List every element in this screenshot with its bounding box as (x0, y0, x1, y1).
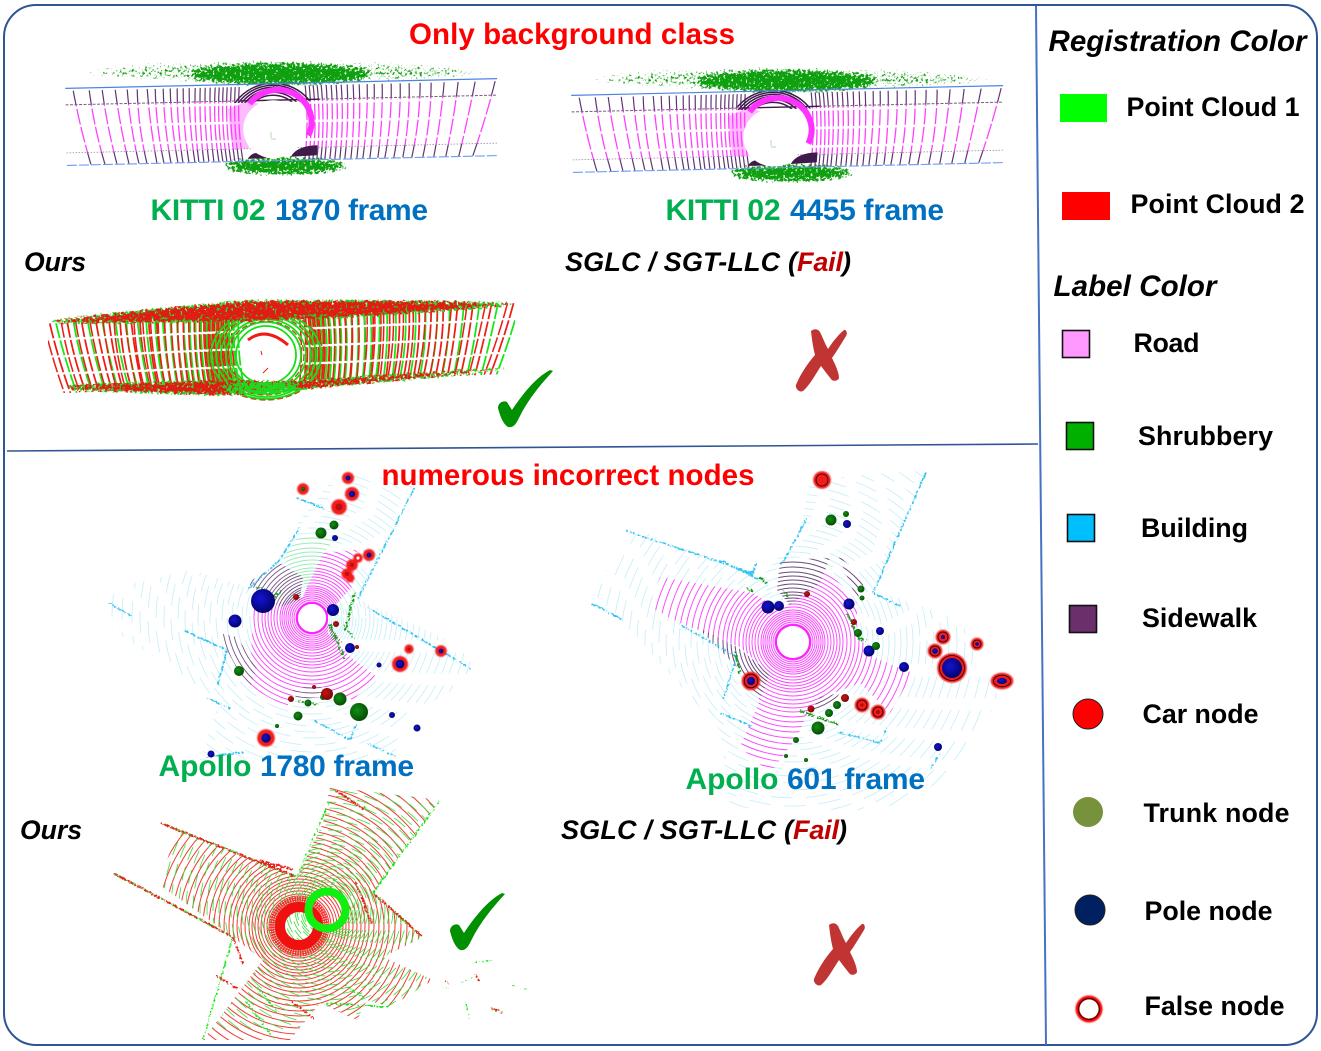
legend item: building (1068, 513, 1248, 543)
panel: KITTI registered point clouds, ours (44, 300, 523, 400)
label: SGLC / SGT-LLC fail, Apollo: ) (835, 815, 847, 845)
label: ours, Apollo: Ours (20, 815, 82, 845)
legend item: shrubbery (1066, 421, 1273, 451)
node: false nodes with red halo (742, 471, 1013, 719)
label: SGLC / SGT-LLC fail, KITTI: ) (839, 247, 851, 277)
legend item: point cloud 1: Point Cloud 1 (1126, 92, 1300, 122)
caption: KITTI 02 1870 frame: KITTI 02 (150, 194, 266, 227)
icon: green check mark, KITTI (498, 370, 553, 427)
label: SGLC / SGT-LLC fail, KITTI: Fail (797, 247, 843, 277)
panel: Apollo 1780 frame semantic point cloud with nodes (108, 471, 471, 760)
legend item: shrubbery: Shrubbery (1138, 421, 1273, 451)
panel: Apollo 601 frame semantic point cloud with nodes (591, 470, 1014, 810)
label: ours, KITTI: Ours (24, 247, 86, 277)
node: car nodes (804, 591, 857, 712)
panel: Apollo registered point clouds, ours (114, 788, 528, 1040)
legend heading: registration color: Registration Color (1048, 25, 1308, 58)
panel: KITTI top-view semantic point cloud, 4455 frame (571, 65, 1005, 185)
icon: green check mark, Apollo (450, 893, 505, 950)
legend item: trunk node: Trunk node (1144, 798, 1290, 828)
legend panel (1048, 25, 1308, 1022)
legend item: false node: False node (1144, 991, 1284, 1021)
icon: red cross, KITTI (796, 329, 847, 391)
caption: KITTI 02 4455 frame: KITTI 02 (666, 194, 780, 227)
legend item: road (1062, 328, 1200, 358)
caption: Apollo 1780 frame: 1780 frame (260, 750, 414, 783)
panel: KITTI top-view semantic point cloud, 1870 frame (65, 58, 499, 178)
legend item: point cloud 2 (1062, 189, 1304, 220)
node: trunk nodes (234, 520, 368, 728)
node: trunk nodes (784, 511, 880, 762)
node: car nodes (288, 594, 359, 702)
caption: KITTI 02 4455 frame: 4455 frame (790, 194, 944, 227)
legend heading: label color: Label Color (1054, 270, 1218, 303)
heading: numerous incorrect nodes: numerous incorrect nodes (382, 459, 754, 492)
caption: Apollo 601 frame: Apollo (686, 763, 778, 796)
caption: KITTI 02 1870 frame: 1870 frame (275, 194, 428, 227)
node: pole nodes (208, 535, 420, 758)
legend item: road: Road (1134, 328, 1200, 358)
legend item: sidewalk (1070, 603, 1257, 633)
legend item: point cloud 2: Point Cloud 2 (1130, 189, 1304, 219)
caption: Apollo 1780 frame (158, 750, 414, 783)
legend item: false node (1076, 991, 1284, 1022)
legend item: pole node: Pole node (1144, 896, 1272, 926)
label: SGLC / SGT-LLC fail, KITTI: SGLC / SGT-LLC ( (565, 247, 800, 277)
label: SGLC / SGT-LLC fail, Apollo: Fail (793, 815, 839, 845)
legend item: trunk node (1073, 797, 1290, 828)
legend item: building: Building (1141, 513, 1248, 543)
caption: Apollo 601 frame (686, 763, 925, 796)
icon: red cross, Apollo (814, 923, 865, 985)
caption: KITTI 02 4455 frame (666, 194, 944, 227)
legend item: car node (1073, 699, 1258, 729)
caption: Apollo 601 frame: 601 frame (787, 763, 925, 796)
heading: only background class: Only background class (409, 18, 735, 51)
node: false nodes with red halo (257, 472, 447, 747)
node: pole nodes (762, 520, 942, 751)
caption: KITTI 02 1870 frame (150, 194, 428, 227)
caption: Apollo 1780 frame: Apollo (158, 750, 252, 783)
label: SGLC / SGT-LLC fail, Apollo: SGLC / SGT-LLC ( (561, 815, 796, 845)
legend item: pole node (1075, 895, 1272, 926)
legend item: sidewalk: Sidewalk (1142, 603, 1257, 633)
legend item: car node: Car node (1142, 699, 1258, 729)
